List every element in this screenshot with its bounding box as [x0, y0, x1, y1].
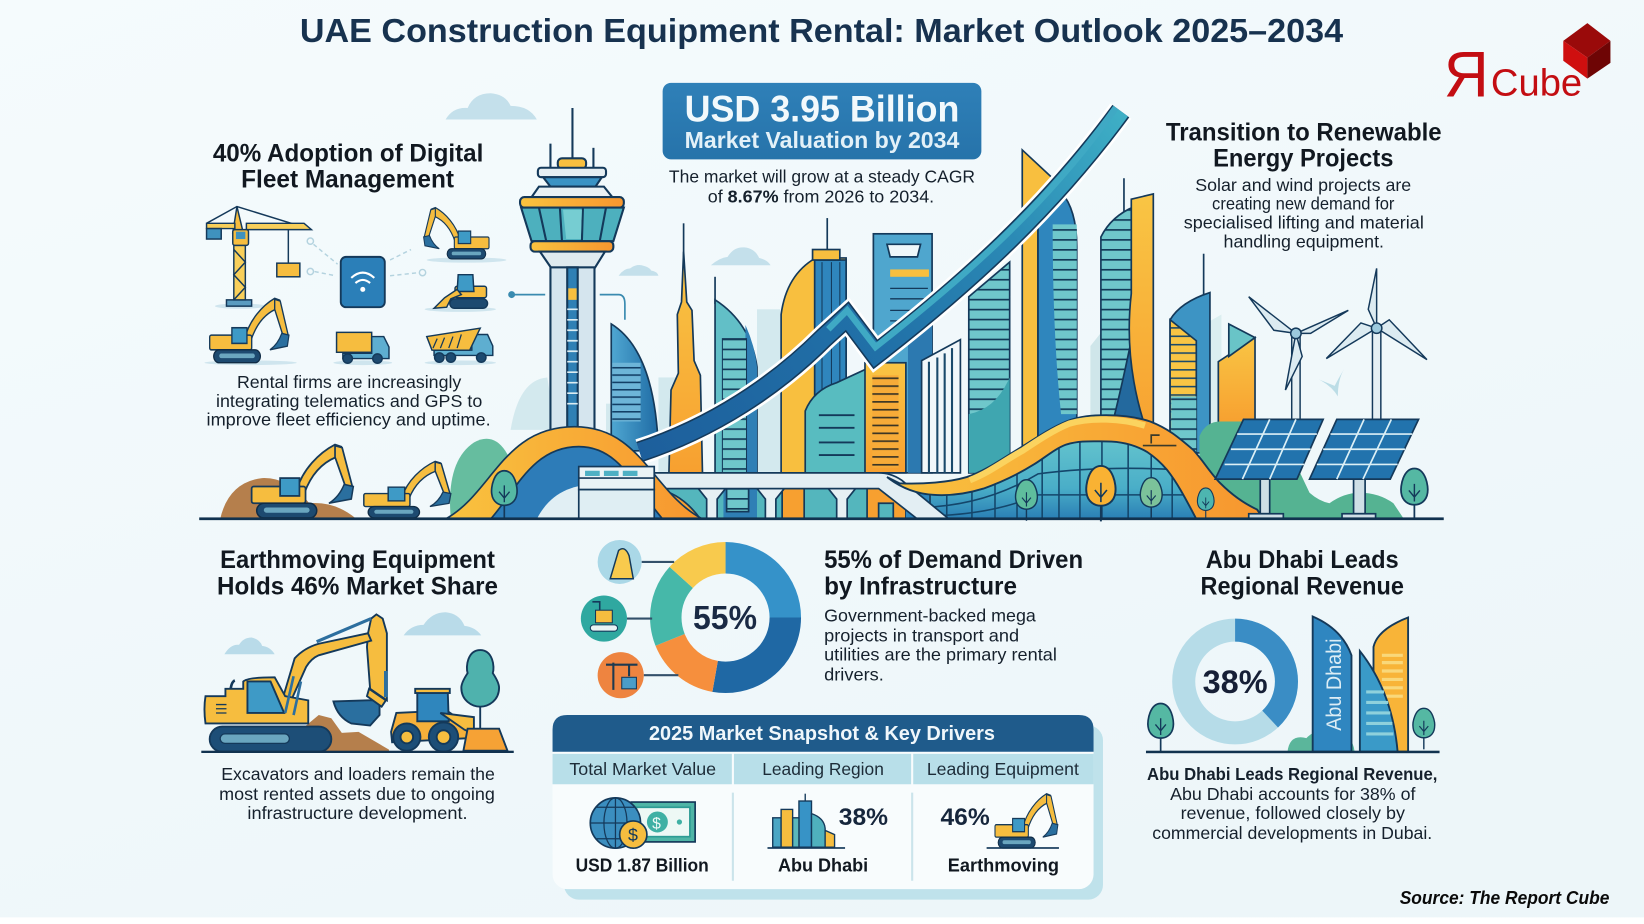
building with name: Abu Dhabi: [1323, 639, 1346, 731]
column dividers: [733, 793, 912, 881]
text: CAGR: of 8.67% from 2026 to 2034.: [708, 186, 934, 206]
building with name: [1313, 616, 1351, 752]
heading: 55% of Demand Driven: [824, 546, 1083, 574]
building blue small: [1360, 651, 1398, 752]
title: UAE Construction Equipment Rental: Market Outlook 2025–2034: [300, 13, 1343, 50]
value labels: Abu Dhabi: [778, 854, 868, 875]
ring chart: [1184, 630, 1286, 733]
body text: most rented assets due to ongoing: [219, 784, 495, 804]
body text: Rental firms are increasingly: [237, 372, 461, 392]
heading: [824, 546, 1083, 600]
excavator arm: [367, 614, 387, 700]
logo wordmark Cube: Cube: [1491, 61, 1582, 103]
building: golden spire: [669, 223, 702, 473]
excavator body: [204, 677, 308, 723]
icon: red cube: [1563, 23, 1610, 79]
bucket: [333, 700, 380, 726]
body text: [824, 606, 1057, 684]
body text: integrating telematics and GPS to: [216, 391, 482, 411]
column headers: [553, 754, 1094, 784]
heading: by Infrastructure: [824, 572, 1017, 600]
heading: Transition to Renewable: [1166, 118, 1442, 146]
value labels: [576, 854, 1059, 875]
heading: [217, 546, 498, 600]
body text: Abu Dhabi accounts for 38% of: [1170, 784, 1415, 804]
building: blue curved: [611, 324, 658, 451]
icon: excavator top right: [424, 208, 489, 259]
icon: tree: [461, 650, 499, 752]
heading: Regional Revenue: [1200, 572, 1404, 600]
heading: Holds 46% Market Share: [217, 572, 498, 600]
donut value: 55%: [693, 600, 757, 637]
dirt pile: [304, 715, 389, 752]
ground line: [201, 751, 514, 753]
heading: 40% Adoption of Digital: [213, 139, 483, 167]
building: white ribbed: [922, 340, 960, 473]
icon: bulldozer: [434, 275, 488, 308]
heading: Abu Dhabi Leads: [1206, 546, 1399, 574]
value labels: USD 1.87 Billion: [576, 854, 709, 875]
body text: Solar and wind projects are: [1195, 175, 1411, 195]
panel header: [553, 715, 1094, 752]
icon: dirt mound: [220, 478, 356, 519]
building: teal curved: [715, 277, 757, 473]
column headers: Leading Equipment: [927, 759, 1079, 779]
panel header: 2025 Market Snapshot & Key Drivers: [649, 723, 995, 745]
icon: tree right: [1413, 708, 1435, 749]
building: orange blade: [1129, 194, 1153, 446]
hills: [450, 421, 1404, 519]
caption: Market Valuation by 2034: [685, 127, 960, 153]
text: CAGR: The market will grow at a steady CAGR: [669, 166, 975, 186]
icon: bird: [1319, 369, 1344, 396]
trees: [492, 466, 1428, 521]
ground line: [1146, 751, 1440, 753]
icon: money and globe: [590, 798, 695, 848]
body text: [207, 372, 491, 430]
icon: excavator: [995, 794, 1058, 848]
body text: creating new demand for: [1212, 194, 1395, 214]
heading: Energy Projects: [1213, 145, 1393, 173]
donut chart: [666, 558, 785, 677]
body text: revenue, followed closely by: [1181, 803, 1405, 823]
clouds: [224, 612, 481, 654]
body text: Excavators and loaders remain the: [221, 764, 495, 784]
icon: building circle: [598, 540, 642, 584]
column headers: Leading Region: [762, 759, 884, 779]
link lines: [307, 238, 426, 276]
station building: [579, 467, 654, 519]
pale background skyline: [511, 309, 1221, 472]
body text: handling equipment.: [1224, 231, 1384, 251]
icon: excavator circle: [581, 596, 627, 642]
section: digital fleet management: [204, 139, 506, 430]
body text: projects in transport and: [824, 626, 1019, 646]
icon: bush: [1288, 731, 1355, 752]
building: low teal: [805, 369, 866, 473]
chart arrow: market growth: [640, 108, 1121, 452]
excavator ground: [987, 847, 1059, 849]
logo wordmark mirrored R: R: [1444, 37, 1489, 110]
heading: [1200, 546, 1404, 600]
panel: 2025 market snapshot: [553, 715, 1103, 900]
elevated road bridge: [650, 473, 949, 519]
air control tower: [509, 108, 625, 433]
body text: improve fleet efficiency and uptime.: [207, 410, 491, 430]
icon: wheel loader: [391, 689, 507, 752]
wind turbines: [1249, 268, 1427, 423]
turbine one: [1249, 297, 1348, 421]
section: infrastructure demand: [581, 540, 1083, 698]
icon: tree left: [1148, 704, 1173, 752]
icon: dump truck: [427, 328, 493, 362]
source note: Source: The Report Cube: [1400, 887, 1609, 908]
section: renewable energy text: [1166, 118, 1442, 251]
logo: RCube: [1444, 23, 1610, 110]
building: teal curved tower: [1101, 178, 1143, 440]
icon: tablet wifi: [341, 257, 385, 307]
body text: drivers.: [824, 664, 884, 684]
building: yellow blade: [1022, 150, 1053, 446]
body text: infrastructure development.: [247, 803, 468, 823]
icon: excavators on site: [252, 445, 451, 518]
icon: large excavator: [204, 614, 389, 752]
ground line: [199, 517, 1444, 520]
icon: mini skyline: [773, 794, 835, 847]
body text: commercial developments in Dubai.: [1152, 823, 1432, 843]
building: tower with open top: [873, 234, 932, 473]
building: blue swoop tower: [1038, 192, 1077, 446]
value labels: Earthmoving: [948, 854, 1059, 875]
icon: money and globe: $: [652, 815, 661, 832]
left orange arch with station: [446, 427, 702, 519]
body text: Government-backed mega: [824, 606, 1036, 626]
value: 46 percent: 46%: [940, 804, 990, 831]
value: 38 percent: 38%: [839, 804, 888, 831]
solar panels: [1215, 419, 1419, 519]
body text: utilities are the primary rental: [824, 645, 1057, 665]
column headers: Total Market Value: [569, 759, 716, 779]
heading: Fleet Management: [241, 166, 455, 194]
building: orange stripes: [865, 363, 906, 473]
body text: Abu Dhabi Leads Regional Revenue,: [1147, 764, 1437, 784]
icon: excavator left: [210, 298, 289, 363]
section: Abu Dhabi regional revenue: [1146, 546, 1440, 843]
turbine two: [1326, 268, 1427, 423]
panel: USD 3.95 Billion: [663, 83, 981, 159]
excavator boom: [283, 633, 371, 707]
body text: [219, 764, 495, 823]
body text: specialised lifting and material: [1184, 213, 1424, 233]
body text: [1147, 764, 1437, 843]
heading: [1166, 118, 1442, 173]
ring value: 38%: [1203, 664, 1268, 700]
icon: money and globe: $: [628, 825, 638, 845]
wave roof: [887, 415, 1263, 519]
solar panel two: [1310, 419, 1419, 519]
section: earthmoving equipment: [201, 546, 514, 823]
skyline ground: [767, 847, 845, 849]
body text: [1184, 175, 1424, 251]
icon: crane circle: [598, 652, 644, 698]
building: tall yellow and blue: [781, 218, 846, 473]
icon: delivery truck: [337, 332, 389, 363]
city skyline: [611, 150, 1255, 473]
connector lines: [627, 562, 678, 675]
glass dome: [930, 442, 1194, 518]
text: CAGR: [669, 166, 975, 206]
building orange: [1373, 618, 1408, 752]
heading: Earthmoving Equipment: [220, 546, 495, 574]
building: teal glass: [969, 262, 1010, 473]
value: USD 3.95 Billion: [685, 89, 959, 130]
clouds: [446, 93, 771, 276]
heading: [213, 139, 483, 194]
connector lines: [509, 292, 625, 320]
solar panel one: [1215, 419, 1323, 519]
vehicle shadows: [204, 257, 506, 365]
tracks: [210, 727, 331, 752]
building: blue and yellow tower: [1170, 254, 1210, 453]
icon: tower crane: [207, 207, 311, 306]
building: orange wedge: [1218, 324, 1255, 425]
